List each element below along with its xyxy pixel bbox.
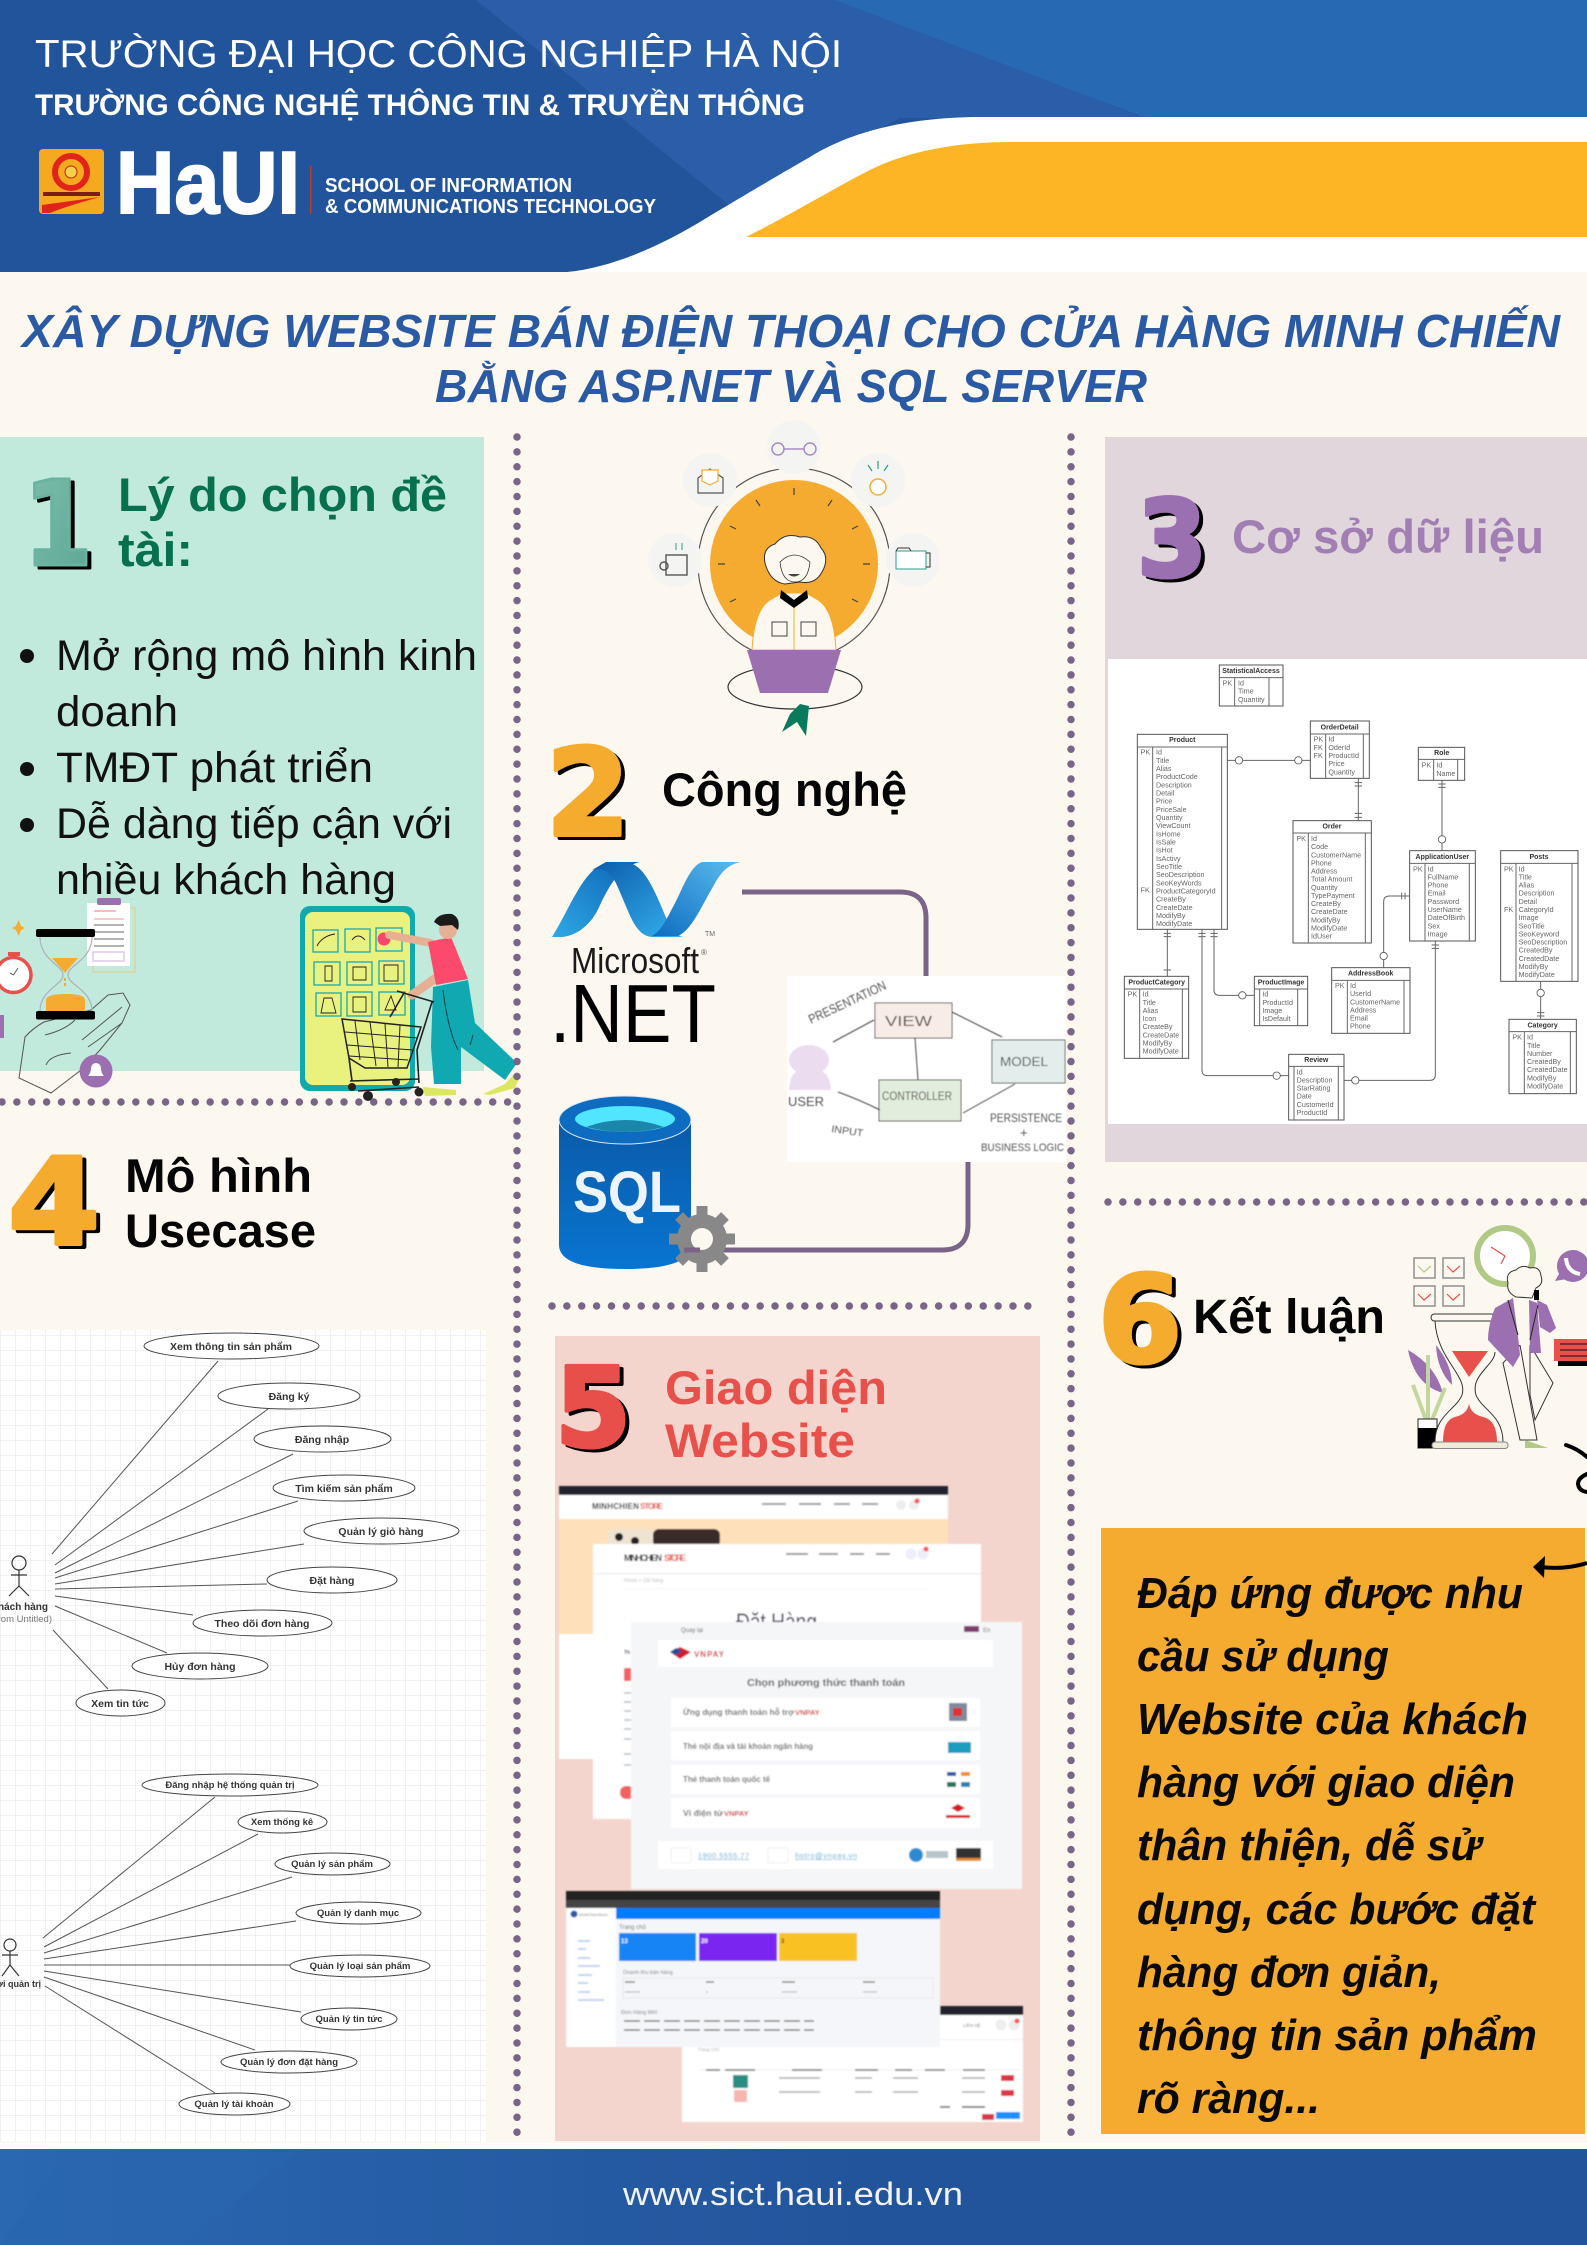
diagram: MVC sketch: + [1020,1125,1028,1140]
chart: ER diagram: SeoKeyWords [1156,879,1202,887]
chart: ER diagram: Phone [1350,1023,1371,1031]
illustration: person with hourglass [1408,1228,1587,1448]
conclusion box: rõ ràng... [1137,2074,1320,2123]
main title [19,305,1561,412]
panel 1: reasons [0,437,519,1101]
laptop [747,650,841,693]
chart: ER diagram: Title [1527,1042,1540,1050]
chart: ER diagram: Image [1262,1007,1282,1015]
screenshot: VNPAY payment: VNPAY [724,1809,749,1818]
screenshot: VNPAY payment: 1900.5555.77 [698,1851,749,1860]
school name: TRƯỜNG CÔNG NGHỆ THÔNG TIN & TRUYỀN THÔNG [35,88,805,122]
chart: ER diagram: Address [1311,868,1338,876]
chart: ER diagram: UserId [1350,990,1371,998]
heading 4: Mô hình [125,1149,312,1202]
screenshot: admin dashboard: 13 [621,1939,628,1945]
chart: ER diagram: Id [1311,835,1317,843]
chart: ER diagram: ApplicationUser [1416,854,1469,861]
diagram: admin use cases: Quản lý sản phẩm [291,1859,373,1870]
chart: ER diagram: Number [1527,1050,1553,1058]
diagram: customer use cases: Xem thông tin sản phẩm [170,1341,292,1353]
main title: BẰNG ASP.NET VÀ SQL SERVER [435,360,1147,412]
shirt [1517,1298,1530,1345]
chart: ER diagram: Password [1428,898,1459,906]
logo: SQL database: SQL [573,1160,681,1225]
screenshot: home page: STORE [640,1502,664,1511]
diagram: MVC sketch: MODEL [1000,1054,1048,1069]
screenshot: VNPAY payment: En [983,1628,990,1634]
chart: ER diagram: Icon [1143,1015,1156,1023]
chart: ER diagram: ProductCategory [1128,979,1185,986]
chart: ER diagram: FK [1314,752,1323,760]
chart: ER diagram: ModifyDate [1527,1082,1563,1090]
chart: ER diagram: CreatedDate [1527,1066,1568,1074]
chart: ER diagram: Quantity [1328,768,1355,776]
screenshot: cart: Trang Chủ [698,2046,720,2052]
chart: ER diagram: SeoDescription [1156,871,1205,879]
screenshot: VNPAY payment: VNPAY [795,1708,820,1717]
chart: ER diagram: PK [1504,865,1514,873]
diagram: admin use cases: Quản lý tài khoản [194,2099,274,2110]
screenshot: VNPAY payment: Ví điện tử [683,1808,724,1818]
heading 5: Website [665,1414,855,1467]
chart: ER diagram: Id [1519,865,1525,873]
panel 4: use case [0,1134,486,2142]
number 6: 6 [1098,1252,1182,1391]
torso [752,593,836,650]
orbit icons [648,420,940,587]
screenshot: checkout page: Đặt Hàng [736,1609,817,1636]
chart: ER diagram: PK [1141,749,1150,757]
diagram: customer use cases: Hủy đơn hàng [164,1661,236,1673]
chart: ER diagram: Quantity [1311,884,1338,892]
chart: ER diagram: Alias [1519,882,1535,890]
chart: ER diagram: ModifyBy [1519,963,1549,971]
diagram: admin use cases: Quản lý đơn đặt hàng [240,2057,338,2068]
chart: ER diagram: ProductId [1297,1109,1327,1117]
chart: ER diagram: PK [1296,835,1306,843]
chart: ER diagram: Detail [1156,789,1175,797]
chart: ER diagram: Sex [1428,922,1440,930]
chart: ER diagram: OrderDetail [1321,724,1359,731]
chart: ER diagram: CreatedBy [1527,1058,1561,1066]
screenshot: VNPAY payment: Ứng dụng thanh toán hỗ trợ [683,1706,795,1717]
chart: ER diagram: ModifyDate [1143,1048,1179,1056]
chart: ER diagram: Address [1350,1006,1377,1014]
screenshot: admin dashboard: 3 [781,1939,785,1945]
conclusion box: hàng đơn giản, [1137,1948,1441,1997]
conclusion box: Đáp ứng được nhu [1137,1569,1523,1618]
chart: ER diagram: Id [1143,991,1149,999]
gear [669,1206,735,1272]
chart: ER diagram: ModifyDate [1156,920,1192,928]
chart: ER diagram: Image [1428,930,1448,938]
conclusion box: thân thiện, dễ sử [1137,1820,1484,1870]
chart: ER diagram: StatisticalAccess [1222,668,1280,675]
heading 5 [665,1361,887,1467]
chart: ER diagram: PK [1422,762,1431,770]
diagram: MVC sketch: VIEW [885,1013,933,1030]
bell badge [80,1054,112,1088]
conclusion box: dụng, các bước đặt [1137,1885,1537,1934]
shirt [428,937,468,985]
connectors [1164,760,1544,1080]
chart: ER diagram: StarRating [1297,1085,1330,1093]
diagram: customer use cases: Xem tin tức [91,1698,149,1710]
chart: ER diagram: Id [1297,1068,1303,1076]
bullet list: doanh [56,688,178,736]
tables [1219,665,1283,706]
screenshot: checkout page: STORE [664,1553,686,1563]
main title: XÂY DỰNG WEBSITE BÁN ĐIỆN THOẠI CHO CỬA HÀNG MINH CHIẾN [19,305,1561,357]
chart: ER diagram: Quantity [1238,696,1265,704]
chart: ER diagram: AddressBook [1348,971,1393,978]
heading 4 [125,1149,316,1257]
bullet list: nhiều khách hàng [56,856,396,904]
chart: ER diagram: Id [1156,749,1162,757]
chart: ER diagram: ProductId [1262,999,1293,1007]
curly arrow [1566,1445,1587,1492]
number 3: 3 [1137,478,1207,601]
chart: ER diagram: ModifyBy [1527,1074,1557,1082]
screenshot: admin dashboard: Trang chủ [619,1924,646,1931]
chart: ER diagram: Price [1156,798,1172,806]
panel 6: conclusion [1098,1228,1587,2134]
shoes [423,1087,456,1096]
chart: ER diagram: CreatedBy [1519,947,1553,955]
chart: ER diagram: Title [1143,999,1156,1007]
screenshot: admin dashboard: Đơn Hàng Mới [621,2010,657,2016]
logo: SCHOOL OF INFORMATION [325,175,572,197]
chart: ER diagram: CreateDate [1143,1031,1179,1039]
logo: Microsoft .NET: Microsoft [571,940,699,981]
chart: ER diagram: CreateDate [1311,908,1348,916]
chart: ER diagram: CreatedDate [1519,955,1559,963]
heading 4: Usecase [125,1204,316,1257]
chart: ER diagram: FK [1314,744,1323,752]
connectors [742,892,926,980]
bullet list: TMĐT phát triển [56,744,373,792]
chart: ER diagram: ModifyDate [1519,971,1555,979]
screenshot: VNPAY payment: Thẻ nội địa và tài khoản ngân hàng [683,1741,813,1751]
diagram: admin use cases: Quản lý danh mục [317,1908,399,1919]
diagram: customer use cases: Đăng ký [269,1391,310,1403]
chart: ER diagram: Id [1436,762,1442,770]
white strip above footer [0,2143,1587,2149]
heading 5: Giao diện [665,1361,887,1414]
university name: TRƯỜNG ĐẠI HỌC CÔNG NGHIỆP HÀ NỘI [35,32,842,76]
chart: ER diagram: SeoTitle [1519,922,1545,930]
chart: ER diagram: IsSale [1156,838,1176,846]
screenshot: VNPAY payment: Chọn phương thức thanh toán [747,1677,905,1689]
chart: ER diagram: ViewCount [1156,822,1190,830]
chart: ER diagram: Price [1328,760,1345,768]
diagram: admin use cases: Quản lý tin tức [315,2014,383,2025]
chart: ER diagram: CustomerName [1311,851,1361,859]
chart: ER diagram: PK [1413,865,1423,873]
diagram: MVC sketch [787,976,1066,1162]
chart: ER diagram: Description [1519,890,1554,898]
heading 2: Công nghệ [662,763,907,816]
chart: ER diagram: Description [1297,1076,1332,1084]
diagram: MVC sketch: BUSINESS LOGIC [981,1142,1064,1154]
diagram: MVC sketch: PERSISTENCE [990,1111,1062,1125]
illustration: person working at laptop [648,420,940,736]
chart: ER diagram: SeoDescription [1519,939,1567,947]
white swoosh [567,117,1587,272]
chart: ER diagram: DateOfBirth [1428,914,1465,922]
chart: ER diagram: Order [1322,824,1342,831]
chart: ER diagram: IsHot [1156,847,1173,855]
icon: hourglass on hand [0,898,135,1093]
diagram: customer use cases: Theo dõi đơn hàng [215,1618,309,1630]
legs [1503,1345,1537,1440]
heading 3: Cơ sở dữ liệu [1232,510,1544,563]
heading 1 [118,468,447,576]
panel 5: website interface [555,1336,1040,2141]
screenshot: VNPAY payment: VNPAY [694,1650,725,1659]
number 4: 4 [8,1134,100,1273]
chart: ER diagram: Posts [1529,854,1549,861]
number 1: 1 [23,455,93,593]
screenshot: admin dashboard: MinhChienStore [579,1912,608,1917]
chart: ER diagram: Alias [1156,765,1172,773]
chart: ER diagram: Category [1528,1022,1558,1029]
chart: ER diagram: Title [1519,873,1532,881]
chart: ER diagram: ModifyBy [1143,1039,1173,1047]
chart: ER diagram: Title [1156,757,1169,765]
number 5: 5 [555,1344,631,1472]
diagram: admin use cases: Xem thống kê [251,1817,313,1828]
chart: ER diagram: ProductImage [1258,979,1304,986]
screenshot: VNPAY payment [631,1622,1022,1889]
diagram: MVC sketch: USER [788,1094,824,1109]
screenshot: admin dashboard: Doanh thu bán hàng [623,1970,673,1976]
cart [342,1019,421,1068]
legs [728,665,862,709]
actor: customer [0,1556,52,1625]
diagram: MVC sketch: CONTROLLER [882,1089,952,1103]
screenshot: cart: LIÊN HỆ [963,2021,981,2028]
chart: ER diagram: ModifyBy [1156,912,1186,920]
screenshot: cart [682,2006,1023,2122]
chart: ER diagram: Phone [1311,859,1332,867]
screenshot: home page [559,1486,948,1759]
panel 3: database [1105,437,1587,1162]
chart: ER diagram: IsHome [1156,830,1181,838]
chart: ER diagram: Id [1262,991,1268,999]
chart: ER diagram: PK [1128,991,1137,999]
icon: shopper with tablet and cart [300,906,519,1101]
logo: Microsoft .NET: ® [701,948,707,957]
chart: ER diagram: Id [1328,736,1334,744]
chart: ER diagram: FK [1504,906,1513,914]
conclusion box: hàng với giao diện [1137,1758,1515,1807]
chart: ER diagram: PriceSale [1156,806,1187,814]
chart: ER diagram: PK [1223,679,1232,687]
chart: ER diagram: PK [1335,982,1345,990]
chart: ER diagram: CreateBy [1311,900,1341,908]
diagram: MVC sketch: INPUT [831,1124,864,1139]
diagram: admin use cases: Quản lý loại sản phẩm [310,1961,410,1972]
pants [431,980,517,1084]
chart: ER diagram: IsDefault [1262,1015,1291,1023]
chart: ER diagram: Email [1350,1015,1368,1023]
chart: ER diagram: SeoKeyword [1519,930,1559,938]
arm [389,935,431,943]
chart: ER diagram: Description [1156,781,1192,789]
logo: Microsoft .NET: TM [705,931,715,938]
diagram: admin use cases: Đăng nhập hệ thống quản trị [165,1780,295,1791]
chart: ER diagram: Review [1304,1057,1329,1064]
logo: Microsoft .NET: .NET [550,967,716,1060]
heading 6: Kết luận [1193,1291,1385,1344]
chart: ER diagram: Id [1238,679,1244,687]
logo: SQL database [559,1096,735,1272]
chart: ER diagram: SeoTitle [1156,863,1182,871]
chart: ER diagram: CreateBy [1156,896,1186,904]
screenshot: VNPAY payment: Thẻ thanh toán quốc tế [683,1774,770,1784]
chart: ER diagram: FullName [1428,873,1458,881]
chart: ER diagram: PK [1512,1034,1522,1042]
chart: ER diagram: IsActivy [1156,855,1181,863]
diagram: admin use cases [0,1733,486,2142]
screenshot: VNPAY payment: Quay lại [681,1628,703,1634]
stopwatch [0,958,31,992]
chart: ER diagram: Role [1434,750,1449,757]
screenshot: checkout page: Th [624,1650,630,1656]
diagram: MVC sketch: PRESENTATION [806,978,888,1027]
chart: ER diagram: IdUser [1311,933,1333,941]
head [764,536,826,584]
number 2: 2 [546,725,630,864]
chart: ER diagram: CustomerName [1350,998,1400,1006]
footer [0,2149,1587,2245]
chart: ER diagram: CategoryId [1519,906,1554,914]
screenshot: checkout page [593,1544,981,1819]
chart: ER diagram: Name [1436,770,1455,778]
diagram: customer use cases: Tìm kiếm sản phẩm [295,1483,393,1495]
chart: ER diagram: Email [1428,890,1446,898]
header banner [0,0,1587,272]
chart: ER diagram: Product [1169,737,1196,744]
conclusion box: cầu sử dụng [1137,1632,1389,1681]
logo: & COMMUNICATIONS TECHNOLOGY [325,196,657,218]
jacket [1488,1298,1520,1367]
chart: ER diagram: CreateBy [1143,1023,1173,1031]
chart: ER diagram: Time [1238,688,1254,696]
chart: ER diagram: UserName [1428,906,1462,914]
heading 1: tài: [118,523,193,576]
chart: ER diagram: ModifyBy [1311,916,1341,924]
note card [1558,1361,1587,1366]
bullet list: Dễ dàng tiếp cận với [56,800,452,848]
chat bubble [1557,1250,1587,1282]
chart: ER diagram: Id [1350,982,1356,990]
chart: ER diagram: Code [1311,843,1328,851]
logo [39,133,657,232]
footer: www.sict.haui.edu.vn [622,2176,963,2212]
diagram: customer use cases: Đăng nhập [295,1434,349,1446]
yellow swoosh [746,142,1587,237]
screenshot: admin dashboard [566,1891,940,2047]
heading 1: Lý do chọn đề [118,468,447,521]
chart: ER diagram: OderId [1328,744,1350,752]
panel 2: technology [546,725,1066,1272]
chart: ER diagram: FK [1141,886,1150,894]
chart: ER diagram: Date [1297,1093,1312,1101]
actor: admin [0,1939,41,1989]
head [439,921,457,939]
screenshot: admin dashboard: 20 [701,1939,708,1945]
chart: ER diagram: CreateDate [1156,904,1193,912]
conclusion box: thông tin sản phẩm [1137,2011,1537,2060]
dotted dividers [2,437,1587,2140]
chart: ER diagram: Id [1527,1034,1533,1042]
chart: ER diagram: PK [1314,736,1323,744]
diagram: customer use cases [0,1330,486,1733]
bullet list [20,632,477,904]
chart: ER diagram: Alias [1143,1007,1159,1015]
chart: ER diagram: Quantity [1156,814,1183,822]
screenshot: VNPAY payment: hotro@vnpay.vn [795,1851,857,1860]
logo: HaUI [116,133,300,232]
chart: ER diagram: Detail [1519,898,1537,906]
chart: ER diagram: CustomerId [1297,1101,1334,1109]
chart: ER diagram: ProductCategoryId [1156,887,1216,895]
chart: ER diagram: ModifyDate [1311,924,1347,932]
chart: ER diagram [1108,659,1587,1124]
chart: ER diagram: ProductCode [1156,773,1198,781]
head [1507,1266,1542,1298]
screenshot: checkout page: MINHCHIEN [624,1553,662,1563]
diagram: customer use cases: Quản lý giỏ hàng [338,1526,424,1538]
diagram: customer use cases: Đặt hàng [310,1575,354,1587]
chart: ER diagram: Phone [1428,882,1448,890]
chart: ER diagram: Id [1428,865,1434,873]
chart: ER diagram: Total Amount [1311,876,1352,884]
chart: ER diagram: TypePayment [1311,892,1355,900]
screenshot: home page: MINHCHIEN [592,1502,639,1511]
bullet list: Mở rộng mô hình kinh [56,632,477,680]
logo: Microsoft .NET [550,862,741,1060]
conclusion box [1101,1528,1587,2134]
screenshot: checkout page: Home > Giỏ hàng [624,1577,664,1584]
chart: ER diagram: ProductId [1328,752,1359,760]
chart: ER diagram: Image [1519,914,1539,922]
conclusion box: Website của khách [1137,1695,1528,1744]
